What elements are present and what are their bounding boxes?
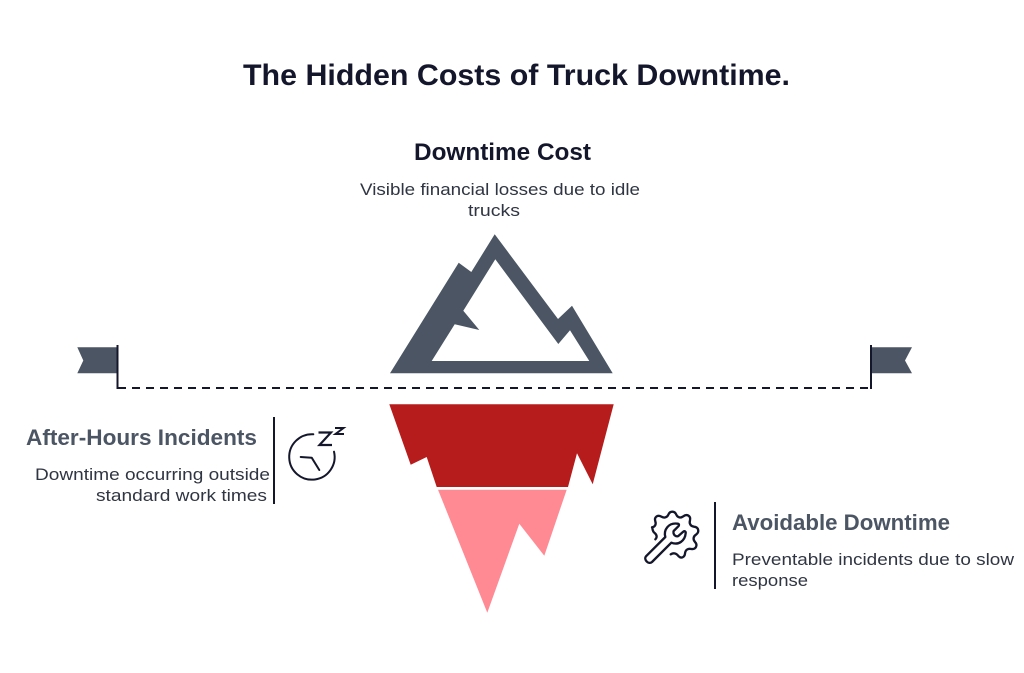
iceberg tip: mountain — [390, 234, 613, 373]
text block: Avoidable Downtime — [732, 510, 1015, 590]
text block: After-Hours Incidents: standard work times — [96, 486, 267, 505]
text block: Avoidable Downtime: response — [732, 571, 808, 590]
heading: Downtime Cost: Downtime Cost — [414, 139, 591, 166]
iceberg underwater: lower section — [438, 490, 567, 613]
divider: after-hours — [273, 417, 275, 504]
right flag — [870, 345, 912, 389]
iceberg underwater: upper section — [389, 404, 614, 487]
heading: Downtime Cost: Visible financial losses due to idle — [360, 180, 640, 199]
text block: After-Hours Incidents: After-Hours Incidents — [26, 425, 257, 450]
text block: Avoidable Downtime: Preventable incidents due to slow — [732, 550, 1015, 569]
heading: Downtime Cost: trucks — [468, 201, 520, 220]
text block: Avoidable Downtime: Avoidable Downtime — [732, 510, 950, 535]
heading: Downtime Cost — [360, 139, 640, 220]
icon: wrench and gear — [645, 512, 698, 563]
text block: After-Hours Incidents: Downtime occurring outside — [35, 465, 270, 484]
left flag — [77, 345, 118, 389]
divider: avoidable — [714, 502, 716, 589]
title: The Hidden Costs of Truck Downtime. — [243, 59, 790, 92]
waterline dashed — [118, 387, 871, 389]
text block: After-Hours Incidents — [26, 425, 270, 505]
icon: sleeping clock — [289, 428, 344, 480]
